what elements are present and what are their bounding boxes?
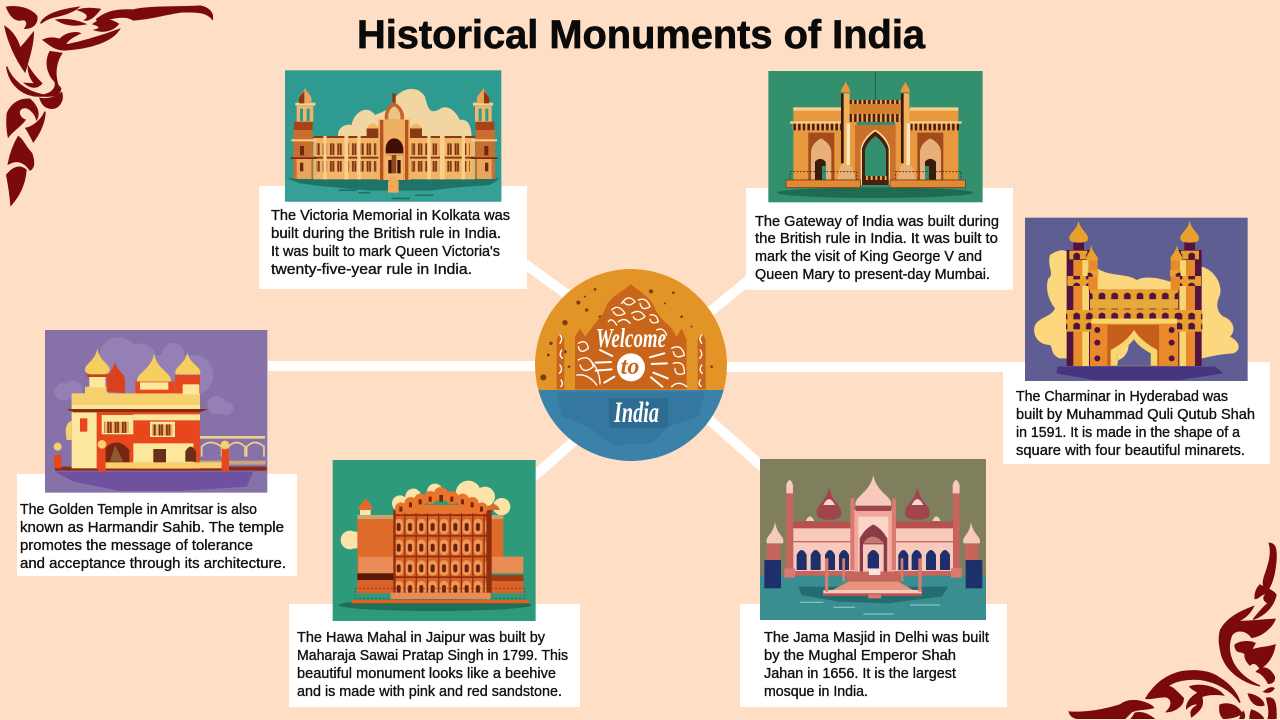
- description: Gateway of India: [755, 214, 999, 283]
- panel: Hawa Mahal: [289, 460, 580, 707]
- taj silhouette: [557, 284, 687, 389]
- description: Gateway of India: the British rule in India. It was built to: [755, 231, 998, 247]
- crown: [395, 487, 488, 514]
- description: Jama Masjid: by the Mughal Emperor Shah: [764, 648, 956, 664]
- image: Charminar: [1025, 218, 1248, 381]
- central hub: Welcome to India badge: [535, 269, 727, 461]
- description: Hawa Mahal: The Hawa Mahal in Jaipur was built by: [297, 630, 546, 646]
- domes: [85, 348, 110, 375]
- description: Hawa Mahal: beautiful monument looks like a beehive: [297, 666, 556, 682]
- description: Charminar: [1016, 389, 1255, 459]
- description: Golden Temple: promotes the message of tolerance: [20, 538, 253, 554]
- swirls: [559, 298, 702, 387]
- panel: Gateway of India: [746, 71, 1013, 290]
- description: Gateway of India: Queen Mary to present-day Mumbai.: [755, 267, 990, 283]
- description: Hawa Mahal: Maharaja Sawai Pratap Singh in 1799. This: [297, 648, 568, 664]
- India lettering: India: [613, 396, 659, 429]
- description: Golden Temple: The Golden Temple in Amritsar is also: [20, 502, 257, 518]
- welcome lettering: Welcome: [596, 323, 666, 353]
- towers: [291, 88, 317, 179]
- description: Charminar: square with four beautiful minarets.: [1016, 443, 1245, 459]
- ornament: bottom-right corner: [1069, 543, 1276, 718]
- description: Golden Temple: [20, 502, 286, 572]
- description: Jama Masjid: mosque in India.: [764, 684, 868, 700]
- description: Victoria Memorial: The Victoria Memorial in Kolkata was: [271, 208, 510, 224]
- title: Historical Monuments of India: [357, 13, 926, 57]
- description: Charminar: The Charminar in Hyderabad was: [1016, 389, 1228, 405]
- description: Charminar: in 1591. It is made in the shape of a: [1016, 425, 1241, 441]
- ornament: top-left corner: [5, 6, 212, 205]
- image: Gateway of India: [768, 71, 983, 202]
- panel: Victoria Memorial: [259, 70, 527, 289]
- description: Gateway of India: mark the visit of King George V and: [755, 249, 982, 265]
- description: Hawa Mahal: and is made with pink and red sandstone.: [297, 684, 562, 700]
- description: Victoria Memorial: twenty-five-year rule in India.: [271, 262, 472, 278]
- causeway arches: [200, 436, 265, 439]
- description: Charminar: built by Muhammad Quli Qutub Shah: [1016, 407, 1255, 423]
- description: Victoria Memorial: built during the British rule in India.: [271, 226, 501, 242]
- description: Jama Masjid: The Jama Masjid in Delhi was built: [764, 630, 989, 646]
- image: Hawa Mahal: [333, 460, 536, 621]
- reflection: [557, 392, 705, 445]
- description: Golden Temple: known as Harmandir Sahib. The temple: [20, 520, 284, 536]
- panel: Golden Temple: [17, 330, 297, 576]
- description: Jama Masjid: [764, 630, 989, 700]
- description: Golden Temple: and acceptance through its architecture.: [20, 556, 286, 572]
- image: Golden Temple: [45, 330, 267, 493]
- connector lines from hub to monuments: [268, 264, 1005, 478]
- description: Jama Masjid: Jahan in 1656. It is the largest: [764, 666, 956, 682]
- rays: [596, 350, 668, 387]
- description: Victoria Memorial: [271, 208, 510, 278]
- panel: Charminar: [1003, 218, 1270, 464]
- panel: Jama Masjid: [740, 459, 1007, 707]
- to lettering: to: [621, 354, 639, 380]
- description: Gateway of India: The Gateway of India was built during: [755, 214, 999, 230]
- image: Jama Masjid: [760, 459, 986, 620]
- description: Hawa Mahal: [297, 630, 568, 700]
- image: Victoria Memorial: [285, 70, 501, 202]
- spots: [540, 288, 713, 380]
- description: Victoria Memorial: It was built to mark Queen Victoria's: [271, 244, 500, 260]
- central block: [392, 93, 396, 104]
